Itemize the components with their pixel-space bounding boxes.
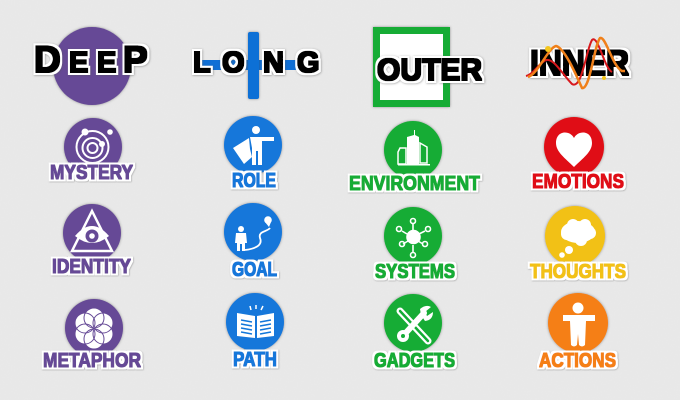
label: METAPHOR [43, 350, 141, 372]
icon: standing figure [563, 302, 595, 346]
item: ACTIONS [539, 293, 616, 372]
icon: eye in triangle [72, 211, 112, 251]
heading: DEEP: P [123, 39, 148, 80]
label: PATH [233, 349, 277, 371]
heading: DEEP [34, 27, 148, 105]
item: GOAL [224, 203, 282, 281]
label: ENVIRONMENT [349, 173, 480, 195]
item: SYSTEMS [375, 207, 455, 283]
heading: INNER [526, 38, 629, 88]
item: METAPHOR [43, 299, 141, 372]
icon: person and winding path to pin [235, 216, 272, 251]
item: MYSTERY [50, 118, 134, 184]
icon: heart [556, 133, 592, 167]
item: EMOTIONS [532, 117, 624, 193]
item: PATH [226, 293, 284, 371]
heading: DEEP: D [34, 39, 61, 80]
icon: atom rings [76, 128, 113, 163]
heading: DEEP: E [97, 47, 116, 79]
icon: caped figure [233, 126, 274, 165]
item: GADGETS [374, 294, 455, 372]
label: GADGETS [374, 350, 455, 372]
icon: thought cloud [559, 219, 596, 258]
item: ENVIRONMENT [349, 121, 480, 195]
icon: open book [237, 305, 274, 338]
icon: flower of life [75, 308, 113, 349]
heading: OUTER: OUTER [377, 52, 482, 87]
heading: DEEP: E [69, 47, 88, 79]
item: THOUGHTS [530, 206, 626, 283]
label: SYSTEMS [375, 261, 455, 283]
icon: network hub [396, 218, 430, 258]
label: ACTIONS [539, 350, 616, 372]
label: GOAL [232, 259, 277, 281]
label: EMOTIONS [532, 171, 624, 193]
label: THOUGHTS [530, 261, 626, 283]
heading: INNER: INNER [530, 44, 629, 83]
heading: LONG: LONG [193, 47, 320, 79]
label: ROLE [232, 170, 276, 192]
item: ROLE [224, 116, 282, 192]
icon: wrench and screwdriver [397, 306, 433, 342]
label: IDENTITY [52, 256, 132, 278]
heading: LONG [193, 32, 320, 99]
heading: OUTER [376, 30, 482, 104]
label: MYSTERY [50, 162, 134, 184]
icon: buildings [398, 130, 430, 166]
item: IDENTITY [52, 204, 132, 278]
